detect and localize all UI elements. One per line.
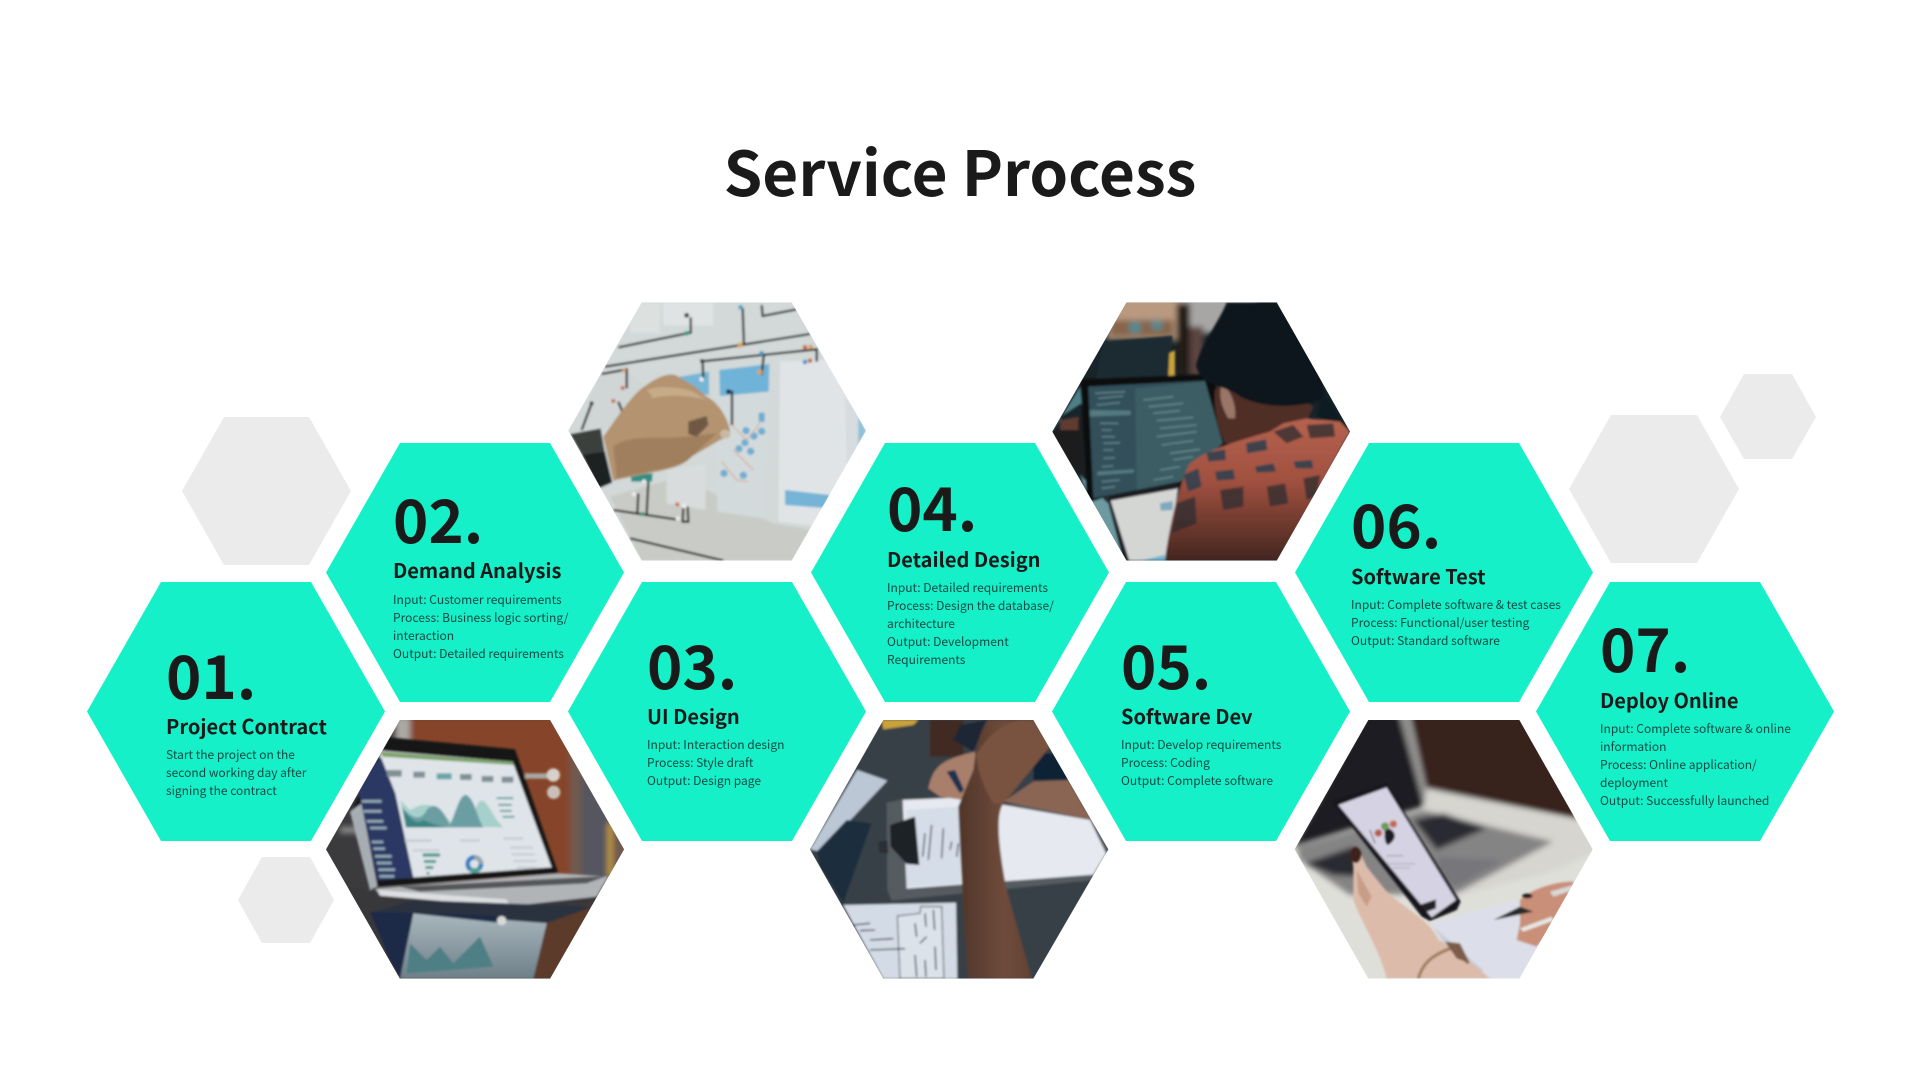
panel: step 02 Demand Analysis [326, 443, 624, 702]
number 07: 07. [1600, 603, 1690, 690]
heading 06: Software Test [1351, 561, 1486, 590]
hand [603, 374, 730, 481]
photo: hand holding a smartphone [1294, 720, 1592, 978]
decorative hexagon: upper right large [1569, 415, 1739, 563]
heading 03: UI Design [647, 701, 740, 730]
phone [1333, 784, 1461, 921]
heading 05: Software Dev [1121, 701, 1253, 730]
decorative hexagon: upper right small [1720, 374, 1816, 459]
panel: step 04 Detailed Design [811, 443, 1109, 702]
decorative hexagon: upper left [182, 417, 351, 565]
heading 04: Detailed Design [887, 544, 1040, 573]
laptop base [375, 873, 608, 907]
description 04: Process: Design the database/ [887, 597, 1054, 614]
description 04: architecture [887, 615, 955, 632]
clipboard [887, 798, 1108, 901]
laptop lid [350, 737, 558, 887]
description 02: interaction [393, 627, 454, 644]
number 03: 03. [647, 620, 737, 707]
panel: step 05 Software Dev [1052, 582, 1350, 841]
hexagon 01 [87, 582, 385, 841]
panel: step 03 UI Design [568, 582, 866, 841]
heading 02: Demand Analysis [393, 555, 561, 584]
photo: laptop with analytics dashboard [326, 720, 624, 979]
description 05: Process: Coding [1121, 754, 1210, 771]
description 04: Input: Detailed requirements [887, 579, 1048, 596]
description 02: Process: Business logic sorting/ [393, 609, 569, 626]
hexagon 02 [326, 443, 624, 702]
description 07: Process: Online application/ [1600, 756, 1757, 773]
description 05: Input: Develop requirements [1121, 736, 1282, 753]
heading 01: Project Contract [166, 711, 327, 740]
description 03: Input: Interaction design [647, 736, 784, 753]
description 07: Output: Successfully launched [1600, 792, 1769, 809]
holding hand [1353, 848, 1490, 979]
photo: developer at a code monitor [1052, 302, 1350, 561]
description 01: Start the project on the [166, 746, 295, 763]
description 06: Process: Functional/user testing [1351, 614, 1530, 631]
description 03: Process: Style draft [647, 754, 754, 771]
head [1215, 382, 1313, 447]
far arm [1003, 780, 1092, 820]
photo: hands writing on a clipboard [810, 720, 1108, 979]
hexagon 07 [1536, 582, 1834, 841]
right hand [1517, 882, 1573, 947]
description 01: second working day after [166, 764, 307, 781]
description 07: information [1600, 738, 1666, 755]
heading 07: Deploy Online [1600, 685, 1738, 714]
photo: hand pinning wireframes on a board [568, 302, 866, 560]
panel: step 07 Deploy Online [1536, 582, 1834, 841]
description 03: Output: Design page [647, 772, 761, 789]
hexagon 05 [1052, 582, 1350, 841]
description 05: Output: Complete software [1121, 772, 1273, 789]
area chart [400, 795, 503, 827]
description 06: Output: Standard software [1351, 632, 1500, 649]
hexagon 03 [568, 582, 866, 841]
number 04: 04. [887, 462, 977, 549]
number 02: 02. [393, 474, 483, 561]
watch [570, 428, 612, 489]
reflection [380, 900, 590, 924]
hexagon 04 [811, 443, 1109, 702]
panel: step 01 Project Contract [87, 582, 385, 841]
number 01: 01. [166, 630, 256, 717]
description 04: Requirements [887, 651, 966, 668]
description 07: Input: Complete software & online [1600, 720, 1791, 737]
description 06: Input: Complete software & test cases [1351, 596, 1561, 613]
shirt [1165, 418, 1350, 561]
decorative hexagon: lower left small [238, 857, 334, 943]
hexagon 06 [1295, 443, 1593, 702]
number 05: 05. [1121, 620, 1211, 707]
writing hand [928, 752, 977, 800]
description 01: signing the contract [166, 782, 277, 799]
panel: step 06 Software Test [1295, 443, 1593, 702]
notebook [1430, 900, 1540, 979]
title: Service Process [724, 124, 1196, 214]
description 02: Input: Customer requirements [393, 591, 562, 608]
number 06: 06. [1351, 479, 1441, 566]
description 04: Output: Development [887, 633, 1009, 650]
description 02: Output: Detailed requirements [393, 645, 564, 662]
description 07: deployment [1600, 774, 1668, 791]
forearm and fist [958, 720, 1050, 979]
